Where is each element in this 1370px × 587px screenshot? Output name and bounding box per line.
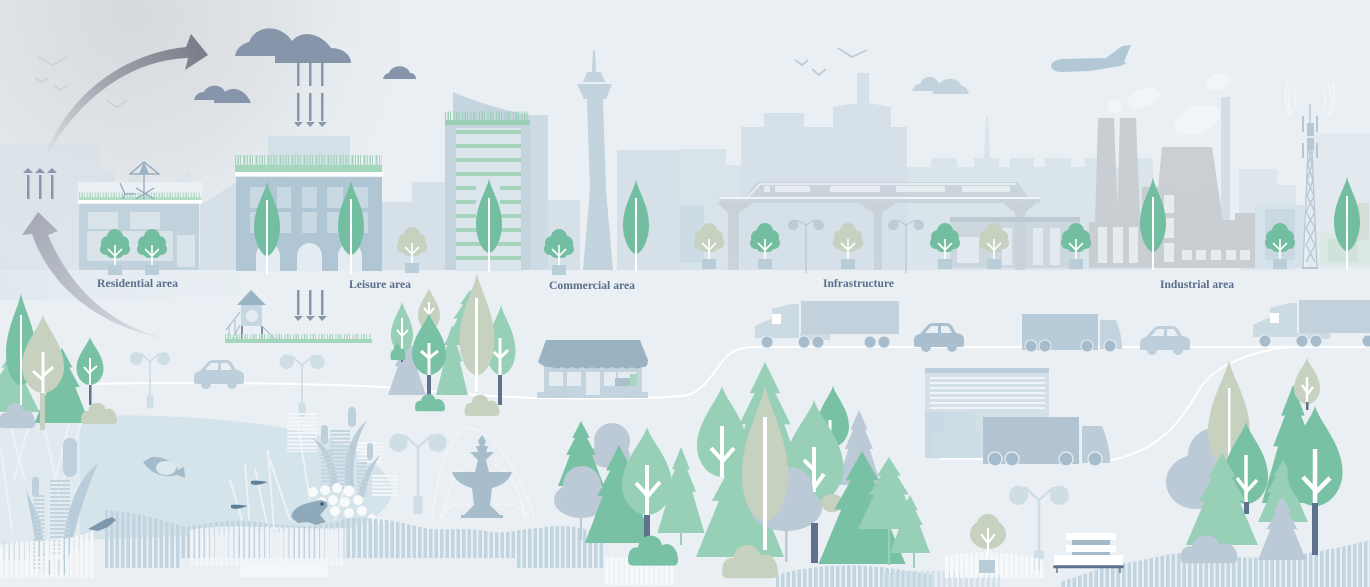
potted tree green: [100, 229, 130, 275]
grass foreground bands: [0, 510, 1370, 587]
pine dark: [558, 421, 604, 486]
tree sage: [22, 315, 64, 430]
smoke: [1108, 70, 1232, 140]
bench: [1054, 533, 1123, 573]
skyline background: [0, 73, 1296, 270]
fish: [143, 457, 185, 478]
white band near bench: [945, 553, 1045, 578]
potted tree green: [137, 229, 167, 275]
tree sage tall: [460, 273, 494, 392]
blue band lawn: [776, 566, 932, 587]
pine light: [658, 447, 704, 545]
potted tree green: [750, 223, 780, 269]
tree dark: [412, 313, 446, 395]
tower body: [445, 125, 530, 270]
stones: [308, 483, 384, 524]
bush sage: [722, 545, 778, 578]
tree cluster centre: [388, 273, 516, 416]
round tree blue: [1166, 428, 1242, 509]
round tree blue: [750, 467, 822, 562]
tree sage back: [418, 288, 440, 330]
pine dark: [585, 445, 653, 543]
upper volume: [268, 136, 350, 172]
bush blue: [1180, 535, 1238, 563]
white band lawn: [605, 557, 675, 585]
plane: [1051, 45, 1131, 72]
bush dark: [628, 536, 678, 566]
potted tree sage: [694, 223, 724, 269]
roof slab: [78, 200, 202, 204]
tree dark: [6, 293, 36, 405]
tree light right: [486, 305, 516, 405]
body: [236, 177, 382, 271]
factory: [1089, 70, 1255, 268]
bush sage: [464, 395, 500, 416]
label: Residential area: Residential area: [97, 278, 178, 290]
road: [90, 347, 1370, 399]
bush dark: [415, 394, 445, 411]
faint boxes right: [1255, 133, 1370, 268]
blue band right: [1060, 540, 1370, 587]
arrow runoff to evaporation: [22, 212, 195, 342]
warehouse: [925, 368, 1110, 466]
pond: [0, 415, 392, 550]
small potted sage tree: [970, 514, 1006, 573]
trucks and cars: [194, 300, 1370, 389]
car 1: [914, 323, 964, 352]
train: [746, 182, 1028, 198]
dark stem: [811, 523, 818, 563]
tadpole: [231, 505, 248, 509]
reeds cattails left: [26, 438, 98, 575]
tower shell: [453, 92, 530, 125]
shop: [537, 340, 648, 398]
precipitation arrows top: [294, 63, 327, 127]
radio waves: [1285, 82, 1335, 116]
bush sage: [81, 403, 117, 424]
fountain: [432, 428, 534, 518]
roof grass: [79, 193, 201, 200]
birds upper left: [35, 57, 127, 107]
station: [950, 217, 1080, 268]
cloud large: [235, 28, 351, 63]
windows: [1098, 195, 1250, 263]
cell tower: [1285, 82, 1335, 268]
tree sage tall: [1208, 360, 1250, 470]
tree light: [622, 427, 672, 540]
shop body: [544, 365, 642, 395]
cooling tower: [1155, 147, 1223, 221]
tree dark large: [1288, 406, 1342, 555]
label: Industrial area: Industrial area: [1160, 279, 1234, 291]
white band under pond: [240, 562, 328, 577]
tree sage tall: [742, 385, 788, 550]
arrow up to sky: [41, 34, 208, 167]
playground: [225, 290, 372, 343]
tree light: [391, 302, 413, 362]
tree light right: [784, 400, 844, 503]
arches: [256, 243, 362, 271]
car 2: [1140, 326, 1190, 355]
reeds white: [1, 420, 350, 530]
umbrella and chair: [120, 162, 159, 199]
pine blue back: [837, 410, 881, 485]
windows: [250, 187, 368, 233]
building: residential: [78, 162, 202, 270]
tree dark: [1224, 422, 1268, 514]
potted tree green: [544, 229, 574, 275]
ground grass: [225, 337, 372, 343]
tadpole: [251, 481, 268, 485]
truck 3: [1253, 300, 1370, 347]
space needle tower: [577, 50, 613, 270]
cloud small: [383, 66, 416, 79]
truck at warehouse: [983, 417, 1110, 466]
roof grass: [235, 161, 382, 172]
building: commercial tower: [445, 92, 530, 271]
windows: [87, 212, 195, 267]
pale band lawn: [880, 571, 1000, 587]
pine blue: [388, 335, 426, 395]
building: leisure: [235, 136, 383, 271]
smoke stacks: [1095, 118, 1140, 223]
white reed bars: [302, 413, 385, 497]
pine dark: [818, 451, 906, 564]
pine dark: [1262, 385, 1324, 503]
tree light: [697, 386, 747, 477]
street lamps mid: [130, 352, 1069, 570]
newt: [88, 517, 116, 531]
birds centre: [795, 48, 867, 75]
roof slab: [235, 172, 383, 176]
tree cluster right: [1166, 358, 1342, 563]
clouds: [194, 28, 416, 103]
tree sage small: [1294, 358, 1320, 410]
building body: [79, 204, 199, 270]
truck 1: [755, 301, 899, 348]
cypress trees upper row: [254, 176, 1360, 274]
pine light: [0, 352, 39, 412]
potted trees row: [100, 223, 1295, 275]
pine light: [858, 457, 930, 568]
label: Infrastructure: Infrastructure: [823, 278, 894, 290]
blue band centre left: [105, 510, 605, 568]
lower back band: [0, 542, 40, 560]
pine blue: [1258, 496, 1306, 560]
tree cluster left: [0, 293, 117, 430]
bush dark: [390, 344, 406, 360]
pine light: [444, 290, 496, 345]
cloud medium: [194, 86, 251, 103]
side road: [940, 347, 1301, 460]
potted tree green: [930, 223, 960, 269]
truck 2: [1022, 314, 1122, 352]
potted tree sage: [979, 223, 1009, 269]
potted tree sage: [833, 223, 863, 269]
street lamps upper row: [788, 220, 924, 273]
factory block: [1089, 183, 1255, 268]
train viaduct: [717, 182, 1041, 270]
roof terrace glass: [78, 182, 202, 200]
round tree blue: [554, 466, 608, 540]
shop windows: [549, 372, 636, 395]
tree cluster foreground centre: [554, 362, 930, 578]
pine light big upper: [725, 362, 805, 482]
tree dark: [817, 386, 849, 450]
pine dark: [34, 348, 90, 423]
pine light: [1186, 453, 1258, 560]
crates: [925, 412, 970, 458]
roof grass: [445, 116, 530, 125]
car 3: [194, 360, 244, 389]
round tree blue back: [590, 423, 630, 468]
pine light small: [1258, 460, 1308, 522]
white band left: [0, 530, 95, 578]
potted tree green: [1265, 223, 1295, 269]
frog: [292, 500, 327, 525]
white band right of pond: [190, 526, 345, 566]
thin chimney: [1221, 97, 1230, 232]
piers: [717, 203, 1036, 270]
evaporation arrows: [23, 168, 57, 199]
balconies: [456, 128, 521, 271]
potted tree sage: [397, 227, 427, 273]
shop roof: [538, 340, 648, 368]
label: Commercial area: Commercial area: [549, 280, 635, 292]
precipitation arrows lower: [294, 290, 327, 321]
pine light: [436, 325, 468, 395]
bush blue: [0, 403, 35, 428]
deck: [720, 197, 1041, 199]
tree small dark: [76, 337, 104, 405]
sage fragment: [821, 494, 843, 512]
cloud pale: [912, 77, 969, 94]
label: Leisure area: Leisure area: [349, 279, 411, 291]
reeds cattails right: [302, 407, 385, 497]
potted tree green: [1061, 223, 1091, 269]
pine light big lower: [696, 440, 784, 557]
